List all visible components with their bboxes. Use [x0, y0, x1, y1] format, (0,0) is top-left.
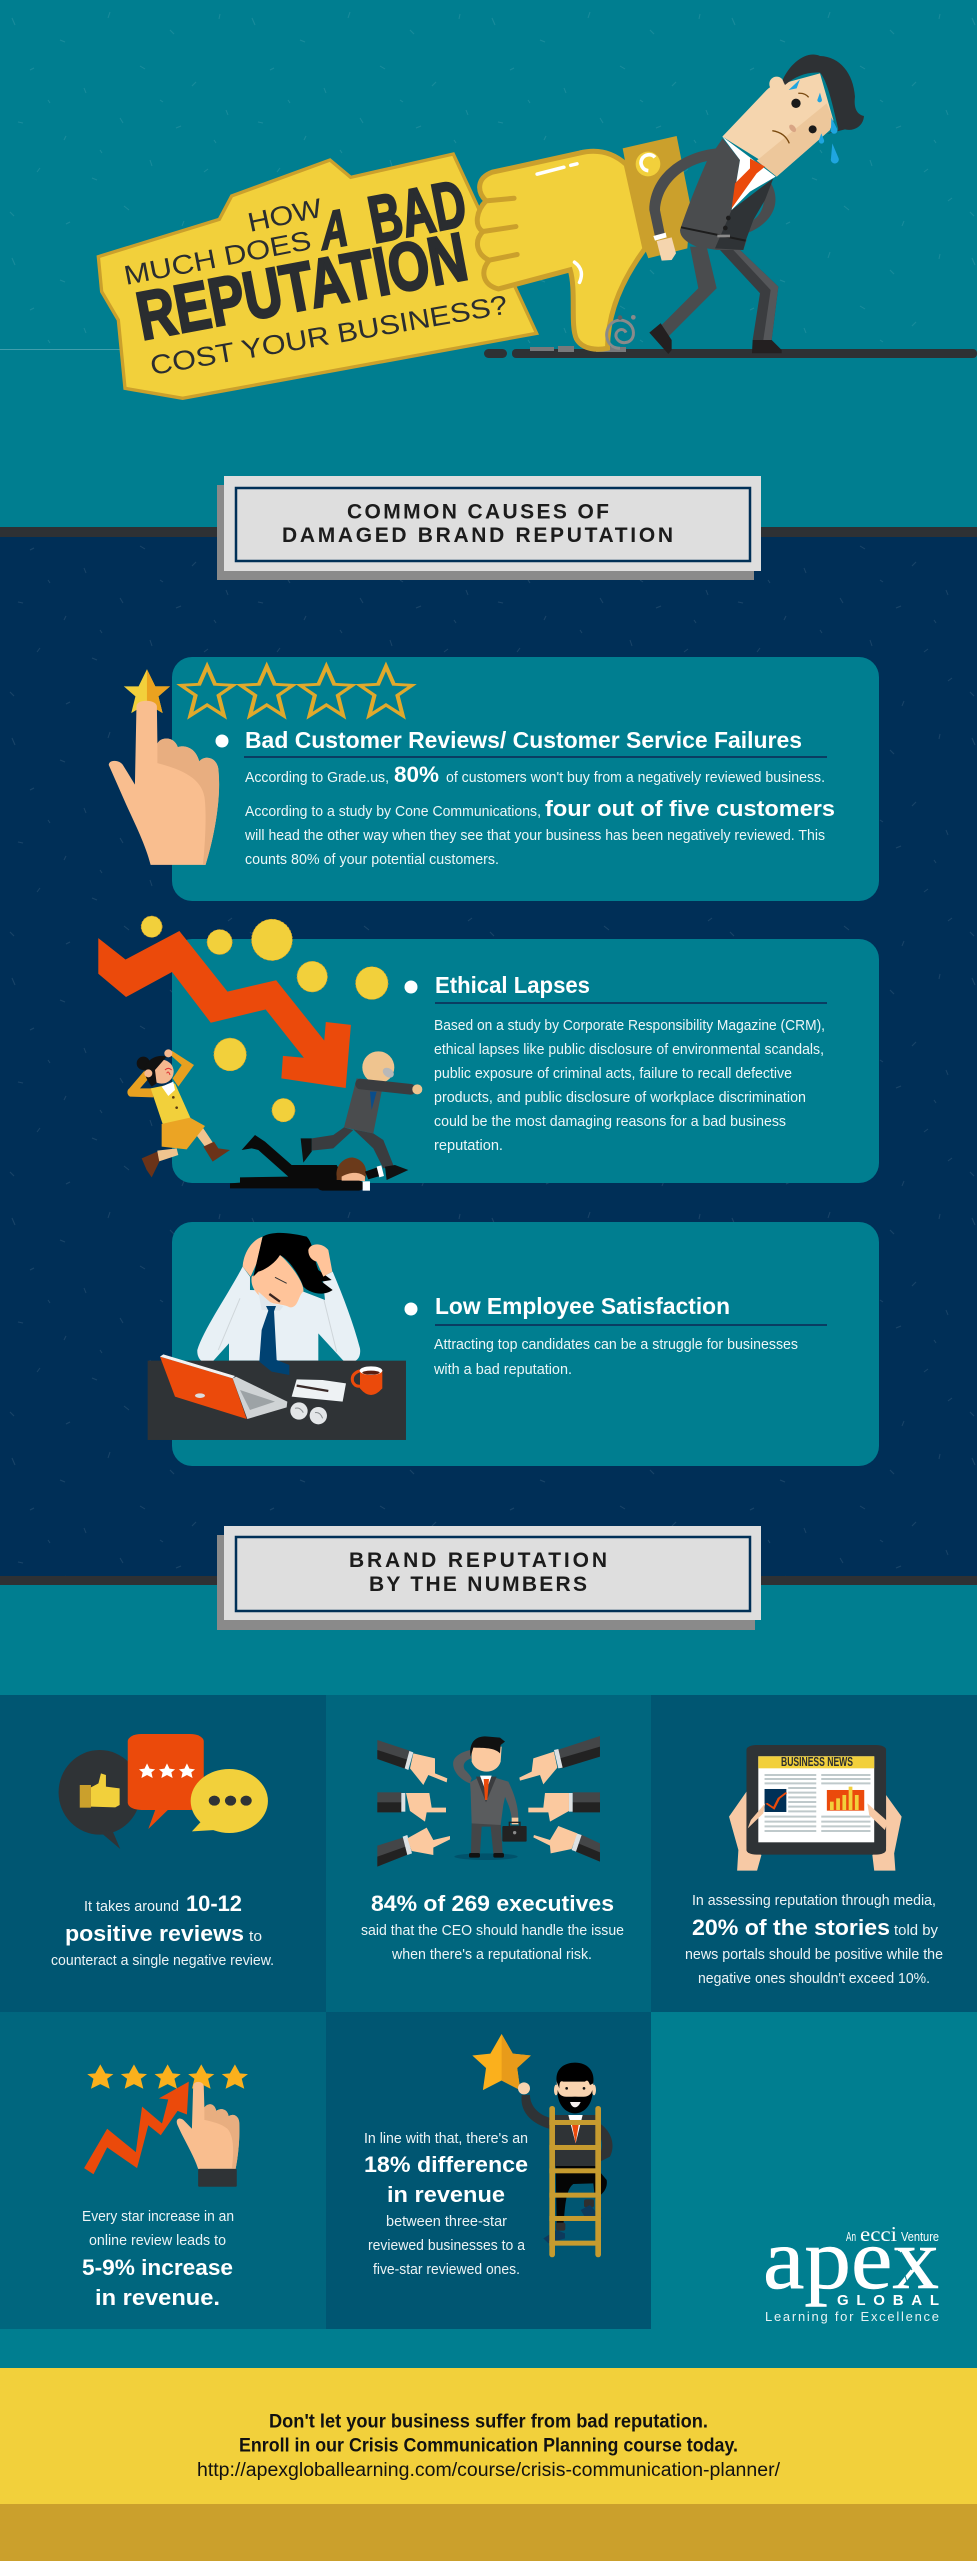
section header: by the numbers: BRAND REPUTATION: [349, 1549, 607, 1572]
illustration: CEO surrounded by thumbs down: [377, 1736, 600, 1867]
logo: apex global: Venture: [901, 2229, 939, 2244]
text block: [51, 1891, 274, 1969]
title text: REPUTATION: [131, 219, 473, 355]
text block: reviewed businesses to a: [368, 2237, 526, 2254]
background: navy causes section: [0, 537, 977, 1576]
text block: [434, 1017, 825, 1154]
text block: positive reviews: [65, 1921, 244, 1946]
text block: [685, 1892, 943, 1987]
logo: apex global: ecci: [860, 2222, 897, 2246]
text block: counteract a single negative review.: [51, 1952, 274, 1969]
heading: Bad Customer Reviews/ Customer Service Failures: [245, 727, 802, 753]
text block: could be the most damaging reasons for a bad business: [434, 1113, 786, 1130]
call to action band: Don't let your business suffer from bad reputation.: [269, 2412, 708, 2432]
panel: ethical lapses: [98, 916, 879, 1191]
text block: 20% of the stories: [692, 1915, 890, 1940]
title text: HOW: [245, 193, 325, 238]
heading: Ethical Lapses: [435, 972, 590, 998]
illustration: stars, rising arrow and hand: [84, 2064, 248, 2187]
text block: [364, 2130, 528, 2278]
text block: 18% difference: [364, 2152, 528, 2177]
illustration: man on ladder: [518, 2063, 613, 2257]
text block: [361, 1891, 624, 1963]
text block: According to a study by Cone Communications,: [245, 803, 541, 820]
heading: [404, 972, 827, 1004]
text block: negative ones shouldn't exceed 10%.: [698, 1970, 930, 1987]
title text: A: [320, 197, 350, 262]
illustration: panicking people: [127, 1049, 422, 1191]
call to action band: Enroll in our Crisis Communication Planning course today.: [239, 2436, 738, 2456]
ground line: [484, 346, 977, 358]
logo: apex global: Learning for Excellence: [765, 2309, 939, 2324]
section header: common causes: [217, 476, 761, 580]
heading: Low Employee Satisfaction: [435, 1293, 730, 1319]
text block: 84% of 269 executives: [371, 1891, 614, 1916]
panel: executives stat: [326, 1695, 651, 2012]
title text: MUCH DOES: [121, 225, 314, 291]
panel: low employee satisfaction: [148, 1222, 879, 1466]
icon: speech bubbles: [59, 1734, 268, 1849]
icon: hand pointing at stars: [109, 666, 412, 865]
section header: common causes: COMMON CAUSES OF: [347, 500, 609, 524]
text block: [433, 1336, 798, 1378]
text block: in revenue.: [95, 2285, 220, 2310]
title text: [121, 166, 510, 381]
panel: media stat: [651, 1695, 977, 2012]
illustration: gold star: [472, 2034, 531, 2090]
heading: [404, 1293, 827, 1326]
illustration: tablet with business news: [729, 1745, 902, 1871]
background: teal numbers section: [0, 1585, 977, 2368]
panel: revenue difference stat: [326, 2012, 651, 2329]
text block: [244, 762, 835, 868]
panel: bad customer reviews: [109, 657, 879, 901]
text block: [82, 2208, 234, 2310]
text block: will head the other way when they see that your business has been negatively reviewed. This: [244, 827, 825, 844]
section header: by the numbers: [217, 1526, 761, 1630]
text block: ethical lapses like public disclosure of environmental scandals,: [434, 1041, 824, 1058]
text block: news portals should be positive while the: [685, 1946, 943, 1963]
text block: Based on a study by Corporate Responsibility Magazine (CRM),: [434, 1017, 825, 1034]
logo: apex global: apex: [763, 2210, 939, 2307]
logo: apex global: An: [846, 2229, 856, 2244]
text block: four out of five customers: [545, 796, 835, 821]
text block: of customers won't buy from a negatively reviewed business.: [446, 769, 825, 786]
illustration: sad businessman: [607, 55, 864, 354]
section header: common causes: DAMAGED BRAND REPUTATION: [282, 524, 673, 547]
icon: thumbs down hand: [477, 151, 645, 349]
title text: COST YOUR BUSINESS?: [148, 290, 510, 381]
text block: In assessing reputation through media,: [692, 1892, 936, 1909]
title text: BAD: [363, 166, 472, 257]
call to action band: [0, 2368, 977, 2561]
text block: Attracting top candidates can be a struggle for businesses: [434, 1336, 798, 1353]
text block: told by: [894, 1922, 938, 1939]
text block: counts 80% of your potential customers.: [245, 851, 499, 868]
text block: products, and public disclosure of workplace discrimination: [434, 1089, 806, 1106]
text block: Every star increase in an: [82, 2208, 234, 2225]
text block: 5-9% increase: [82, 2255, 233, 2280]
text block: It takes around: [84, 1898, 179, 1915]
text block: 80%: [394, 762, 439, 787]
section header: by the numbers: BY THE NUMBERS: [369, 1573, 587, 1596]
panel: star increase stat: [0, 2012, 326, 2329]
text block: online review leads to: [89, 2232, 226, 2249]
logo: apex global: GLOBAL: [837, 2292, 939, 2309]
text block: According to Grade.us,: [245, 769, 389, 786]
text block: between three-star: [386, 2213, 507, 2230]
text block: said that the CEO should handle the issue: [361, 1922, 624, 1939]
text block: with a bad reputation.: [433, 1361, 572, 1378]
text block: when there's a reputational risk.: [391, 1946, 592, 1963]
illustration: falling arrow and coins: [98, 916, 388, 1122]
text block: In line with that, there's an: [364, 2130, 528, 2147]
panel: review bubbles stat: [0, 1695, 326, 2012]
text block: to: [249, 1928, 262, 1945]
illustration: stressed employee at desk: [148, 1233, 406, 1440]
text block: in revenue: [387, 2182, 505, 2207]
text block: public exposure of criminal acts, failure to recall defective: [434, 1065, 792, 1082]
text block: 10-12: [186, 1891, 242, 1916]
background: teal hero section: [0, 0, 977, 537]
text block: five-star reviewed ones.: [373, 2261, 520, 2278]
text block: reputation.: [434, 1137, 503, 1154]
illustration: tablet with business news: BUSINESS NEWS: [781, 1754, 853, 1769]
title sign: [98, 154, 537, 398]
call to action band: http://apexgloballearning.com/course/crisis-communication-planner/: [197, 2460, 781, 2481]
